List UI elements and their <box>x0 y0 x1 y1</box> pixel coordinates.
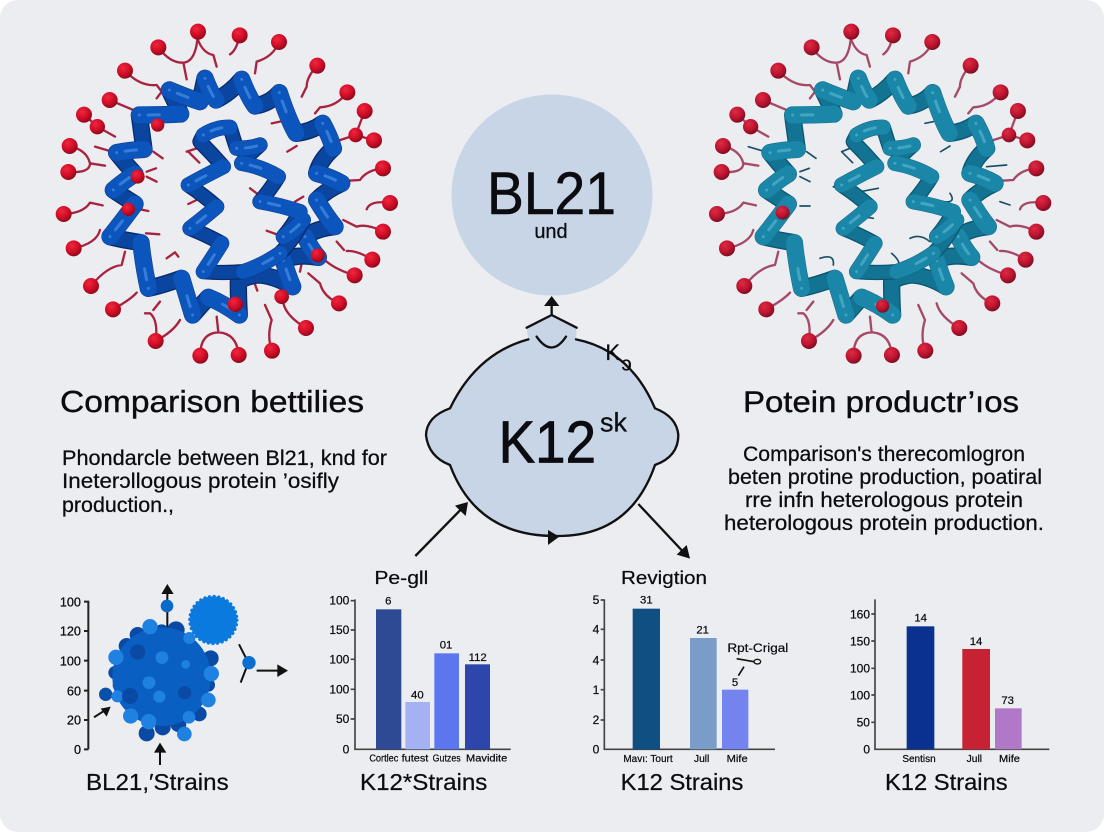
bar chart: blue red purple: 14 <box>914 613 927 625</box>
left description <box>62 447 387 517</box>
arrow: lower right out of K12 <box>638 504 690 559</box>
bar chart: three bars: Jull <box>694 754 709 765</box>
bar chart: K12 four bars <box>329 594 511 765</box>
crimson residue spheres <box>709 24 1051 364</box>
right description: heterologous protein production. <box>724 512 1044 535</box>
K sub label <box>605 340 632 376</box>
left description: production., <box>62 494 174 517</box>
red residue spheres <box>56 24 398 364</box>
K sub label: ɔ <box>621 353 632 376</box>
bar chart: blue red purple: Jull <box>967 754 982 765</box>
bar chart: blue red purple: 14 <box>970 636 982 648</box>
bar chart: three bars: Mife <box>727 754 748 765</box>
left description: Phondarcle between Bl21, knd for <box>62 447 387 470</box>
bar chart: K12 four bars: 01 <box>440 639 452 651</box>
chart title: Revigtion: Revigtion <box>621 567 707 588</box>
protein ring: BL21 blue helix <box>56 24 398 364</box>
K12 lobed node with arrows <box>415 296 690 559</box>
chart group: BL21 cell and K12 bars <box>60 567 511 795</box>
BL21 circle node: und <box>534 221 568 243</box>
bar chart: blue red purple <box>850 599 1049 765</box>
bar chart: blue red purple: 73 <box>1001 695 1014 707</box>
chart group: K12 bar charts right <box>593 567 1049 795</box>
bar chart: three bars: 21 <box>696 624 709 636</box>
axis: BL21 cell: 60 <box>67 684 81 698</box>
bar chart: blue red purple: 50 <box>857 716 870 730</box>
left heading: Comparison bettilies <box>60 384 364 419</box>
callout: Rpt-Crigal: Rpt-Crigal <box>727 641 788 655</box>
stems: outer mauve linkers <box>717 32 1043 356</box>
bar chart: three bars: 5 <box>593 593 600 607</box>
K12 superscript label: K12 <box>499 410 596 476</box>
chart title: Pe-gll: Pe-gll <box>374 567 428 588</box>
helix: inner ribbon <box>842 127 957 272</box>
bar chart: blue red purple: 0 <box>863 743 870 757</box>
bar chart: K12 four bars: 100 <box>329 653 350 667</box>
right description: rre infn heterologous protein <box>745 489 1023 512</box>
arrow: lower left into K12 <box>415 502 468 556</box>
bar chart: K12 four bars: 150 <box>329 623 350 637</box>
bar chart: K12 four bars: 50 <box>336 712 350 726</box>
bar chart: K12 four bars: 112 <box>469 652 487 664</box>
left description: Ineterɔllogous protein ’osifly <box>62 470 340 493</box>
label: BL21 strains: BL21,′Strains <box>86 769 229 795</box>
axis: BL21 cell: 100 <box>60 596 81 610</box>
bar chart: K12 four bars: 100 <box>329 594 350 608</box>
icon: arrows around cell <box>94 584 288 765</box>
label: K12 strains third: K12 Strains <box>621 769 743 795</box>
bar chart: K12 four bars: 100 <box>329 682 350 696</box>
bar chart: K12 four bars: Mavidite <box>466 754 508 765</box>
arrow: up to BL21 <box>544 296 559 306</box>
callout: Rpt-Crigal <box>727 641 788 676</box>
axis: BL21 cell: 120 <box>60 625 81 639</box>
helix: inner ribbon <box>188 127 303 272</box>
bar chart: blue red purple: Sentisn <box>902 754 936 765</box>
protein ring: K12 teal helix <box>709 24 1051 364</box>
helix: outer ribbon <box>763 78 995 315</box>
right description <box>724 443 1044 535</box>
axis: BL21 cell: 20 <box>67 714 81 728</box>
bar chart: three bars: Mavı: Tourt <box>623 754 673 765</box>
label: K12 strains fourth: K12 Strains <box>885 769 1008 795</box>
bar chart: blue red purple: 160 <box>850 607 870 621</box>
BL21 circle node: BL21 <box>487 160 616 227</box>
bar chart: three bars: 0 <box>593 743 600 757</box>
bar chart: K12 four bars: Gutzes <box>433 754 461 765</box>
stems: inner dark and teal side chains <box>748 122 1010 268</box>
BL21 circle node <box>452 94 652 296</box>
bar chart: three bars: 31 <box>640 595 653 607</box>
axis: BL21 cell: 100 <box>60 654 81 668</box>
bar chart: K12 four bars: 6 <box>385 596 391 608</box>
right heading: Potein productr’ıos <box>743 386 1019 419</box>
K sub label: K <box>605 340 620 365</box>
right description: beten protine production, poatiral <box>728 466 1042 489</box>
bar chart: K12 four bars: Cortlec <box>369 754 398 765</box>
bar chart: three bars: 4 <box>593 623 600 637</box>
bar chart: blue red purple: 150 <box>850 634 870 648</box>
arrowhead on outline <box>548 530 559 545</box>
icon: BL21 cell cluster <box>99 596 256 741</box>
right description: Comparison's therecomlogron <box>743 443 1025 466</box>
bar chart: three bars: 5 <box>732 677 738 689</box>
bar chart: three bars: 1 <box>593 683 600 697</box>
bar chart: K12 four bars: 40 <box>411 689 424 701</box>
axis: BL21 cell: 0 <box>74 743 81 757</box>
K12 superscript label: sk <box>600 408 627 438</box>
bar chart: K12 four bars: futest <box>402 754 429 765</box>
bar chart: three bars: 2 <box>593 713 600 727</box>
bar chart: blue red purple: 100 <box>850 662 870 676</box>
helix: outer ribbon <box>110 78 342 315</box>
axis: BL21 cell <box>60 596 88 757</box>
bar chart: three bars: 4 <box>593 653 600 667</box>
stems: outer red linkers <box>64 32 390 356</box>
label: K12 strains: K12*Strains <box>360 769 487 795</box>
bar chart: blue red purple: Mife <box>999 754 1020 765</box>
bar chart: three bars <box>593 593 788 765</box>
bar chart: blue red purple: 100 <box>850 688 870 702</box>
bar chart: K12 four bars: 0 <box>343 743 350 757</box>
